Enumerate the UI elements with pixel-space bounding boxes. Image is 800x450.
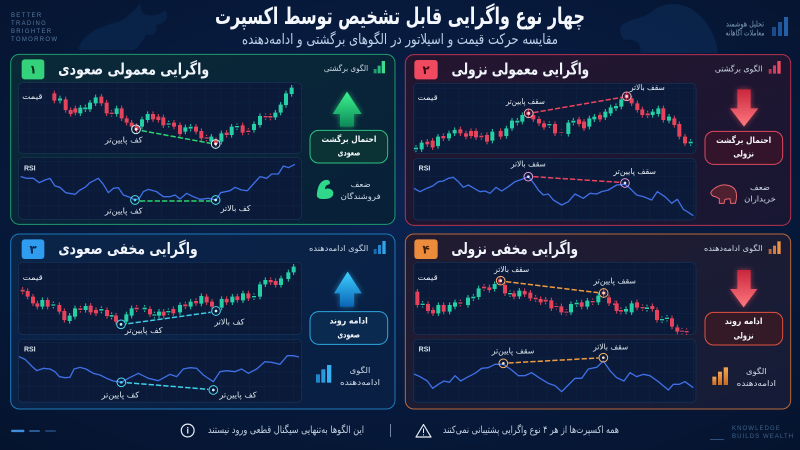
panel 3: hidden bullish divergence [11, 234, 395, 409]
RSI chart 4: RSI [419, 347, 430, 354]
callout 3 [310, 312, 388, 344]
panel 2: regular bearish divergence [405, 55, 791, 225]
continuation text 4: ادامه‌دهنده [737, 379, 776, 388]
top-left tagline: BETTER [11, 13, 42, 19]
callout 1: احتمال برگشت [321, 134, 377, 145]
panel 3 frame [11, 234, 395, 409]
RSI chart 2: سقف بالاتر [510, 159, 546, 168]
heading 1: واگرایی معمولی صعودی [58, 59, 209, 78]
price chart 3 [18, 262, 302, 335]
arrow down red [730, 89, 758, 127]
top-left tagline: TRADING [11, 21, 47, 27]
icon: bear [711, 185, 737, 203]
bull silhouette [78, 3, 167, 50]
panel 1: regular bullish divergence [11, 54, 395, 224]
top-left tagline: TOMORROW [11, 37, 58, 43]
icon: flexed muscle [317, 180, 333, 199]
RSI chart 4: سقف بالاتر [592, 342, 628, 351]
footer note left: این الگوها به‌تنهایی سیگنال قطعی ورود نیستند [208, 424, 364, 436]
RSI chart 4 [413, 339, 696, 403]
badge 4 [414, 239, 438, 259]
price chart 3: کف بالاتر [213, 317, 245, 326]
badge 1: ۱ [29, 63, 37, 77]
panel 4 frame [405, 234, 791, 409]
RSI chart 1: RSI [24, 165, 36, 172]
bottom-right tagline [710, 426, 794, 440]
price chart 3: قیمت [23, 273, 43, 282]
panel 1 frame [11, 54, 395, 224]
icon: info [181, 424, 194, 437]
tag 3 [309, 241, 386, 254]
top-left tagline: BRIGHTER [11, 29, 52, 35]
callout 2 [705, 131, 783, 164]
price chart 2: سقف پایین‌تر [505, 97, 545, 106]
badge 3: ۳ [29, 242, 37, 256]
continuation text 4: الگوی [746, 366, 767, 376]
title: چهار نوع واگرایی قابل تشخیص توسط اکسپرت [215, 3, 585, 30]
icon: orange bars [712, 367, 728, 385]
icon: info: i [186, 426, 189, 436]
tag 3: الگوی ادامه‌دهنده [309, 243, 368, 253]
top-left tagline [11, 13, 58, 43]
price chart 2: سقف بالاتر [629, 83, 665, 92]
buyer weakness text: ضعف [750, 183, 770, 192]
callout 1: صعودی [338, 148, 360, 158]
badge 2: ۲ [422, 63, 430, 77]
tag 4: الگوی ادامه‌دهنده [704, 243, 763, 253]
seller weakness text: فروشندگان [341, 191, 381, 201]
price chart 4: قیمت [418, 273, 438, 282]
RSI chart 2: سقف پایین‌تر [612, 167, 656, 176]
callout 3: صعودی [337, 330, 360, 340]
arrow up green [333, 92, 362, 127]
heading 2: واگرایی معمولی نزولی [451, 59, 589, 78]
continuation text 3: الگوی [350, 365, 370, 375]
price chart 1 [18, 83, 302, 153]
callout 2: نزولی [733, 149, 754, 159]
panel 4: hidden bearish divergence [405, 234, 791, 409]
top-right brand: تحلیل هوشمند [726, 20, 764, 28]
tag 1: الگوی برگشتی [324, 63, 368, 73]
badge 3 [22, 239, 44, 259]
footer progress dashes [11, 430, 56, 432]
callout 1 [310, 130, 388, 163]
RSI chart 2: RSI [419, 166, 430, 173]
price chart 1: قیمت [22, 92, 43, 101]
buyer weakness text: خریداران [744, 194, 776, 203]
price chart 4 [413, 262, 696, 335]
badge 1 [22, 59, 44, 79]
callout 4 [705, 312, 783, 345]
badge 4: ۴ [422, 242, 430, 256]
tag 2 [715, 61, 781, 74]
price chart 1: کف پایین‌تر [104, 135, 143, 144]
callout 3: ادامه روند [329, 317, 368, 327]
top-right brand [726, 17, 788, 38]
bottom-right tagline: KNOWLEDGE [732, 426, 781, 432]
callout 4: ادامه روند [725, 317, 763, 327]
price chart 3: کف پایین‌تر [124, 326, 163, 335]
RSI chart 4: سقف پایین‌تر [491, 346, 535, 355]
tag 1 [324, 61, 385, 73]
callout 2: احتمال برگشت [716, 135, 771, 146]
buyer weakness text [744, 183, 776, 203]
bottom-right tagline: BUILDS WEALTH [732, 434, 794, 440]
RSI chart 3: RSI [24, 347, 36, 354]
tag 4 [704, 241, 781, 254]
heading 3: واگرایی مخفی صعودی [58, 239, 198, 258]
price chart 2 [413, 83, 696, 153]
icon: blue bars [316, 365, 331, 383]
icon: warning [416, 424, 431, 437]
arrow up blue [334, 272, 362, 307]
continuation text 3: ادامه‌دهنده [340, 378, 380, 387]
RSI chart 2 [413, 158, 696, 220]
footer note right: همه اکسپرت‌ها از هر ۴ نوع واگرایی پشتیبانی نمی‌کنند [443, 424, 619, 436]
arrow down red 4 [730, 270, 757, 307]
continuation text 3 [340, 365, 380, 387]
RSI chart 3: کف پایین‌تر [100, 390, 139, 399]
badge 2 [414, 60, 438, 79]
subtitle: مقایسه حرکت قیمت و اسیلاتور در الگوهای برگشتی و ادامه‌دهنده [242, 31, 558, 48]
seller weakness text: ضعف [351, 180, 371, 189]
heading 4: واگرایی مخفی نزولی [451, 239, 578, 258]
price chart 4: سقف پایین‌تر [592, 276, 636, 285]
RSI chart 3: کف پایین‌تر [218, 390, 257, 399]
RSI chart 1 [18, 158, 302, 219]
price chart 2: قیمت [418, 93, 438, 102]
seller weakness text [341, 180, 381, 201]
price chart 4: سقف بالاتر [493, 265, 529, 274]
panel 2 frame [405, 55, 791, 225]
RSI chart 1: کف بالاتر [220, 204, 251, 213]
top-right brand: معاملات آگاهانه [726, 28, 764, 38]
callout 4: نزولی [734, 331, 754, 341]
tag 2: الگوی برگشتی [715, 63, 762, 73]
RSI chart 3 [18, 339, 302, 403]
bear silhouette [620, 4, 718, 53]
RSI chart 1: کف پایین‌تر [104, 206, 143, 215]
continuation text 4 [737, 366, 776, 388]
